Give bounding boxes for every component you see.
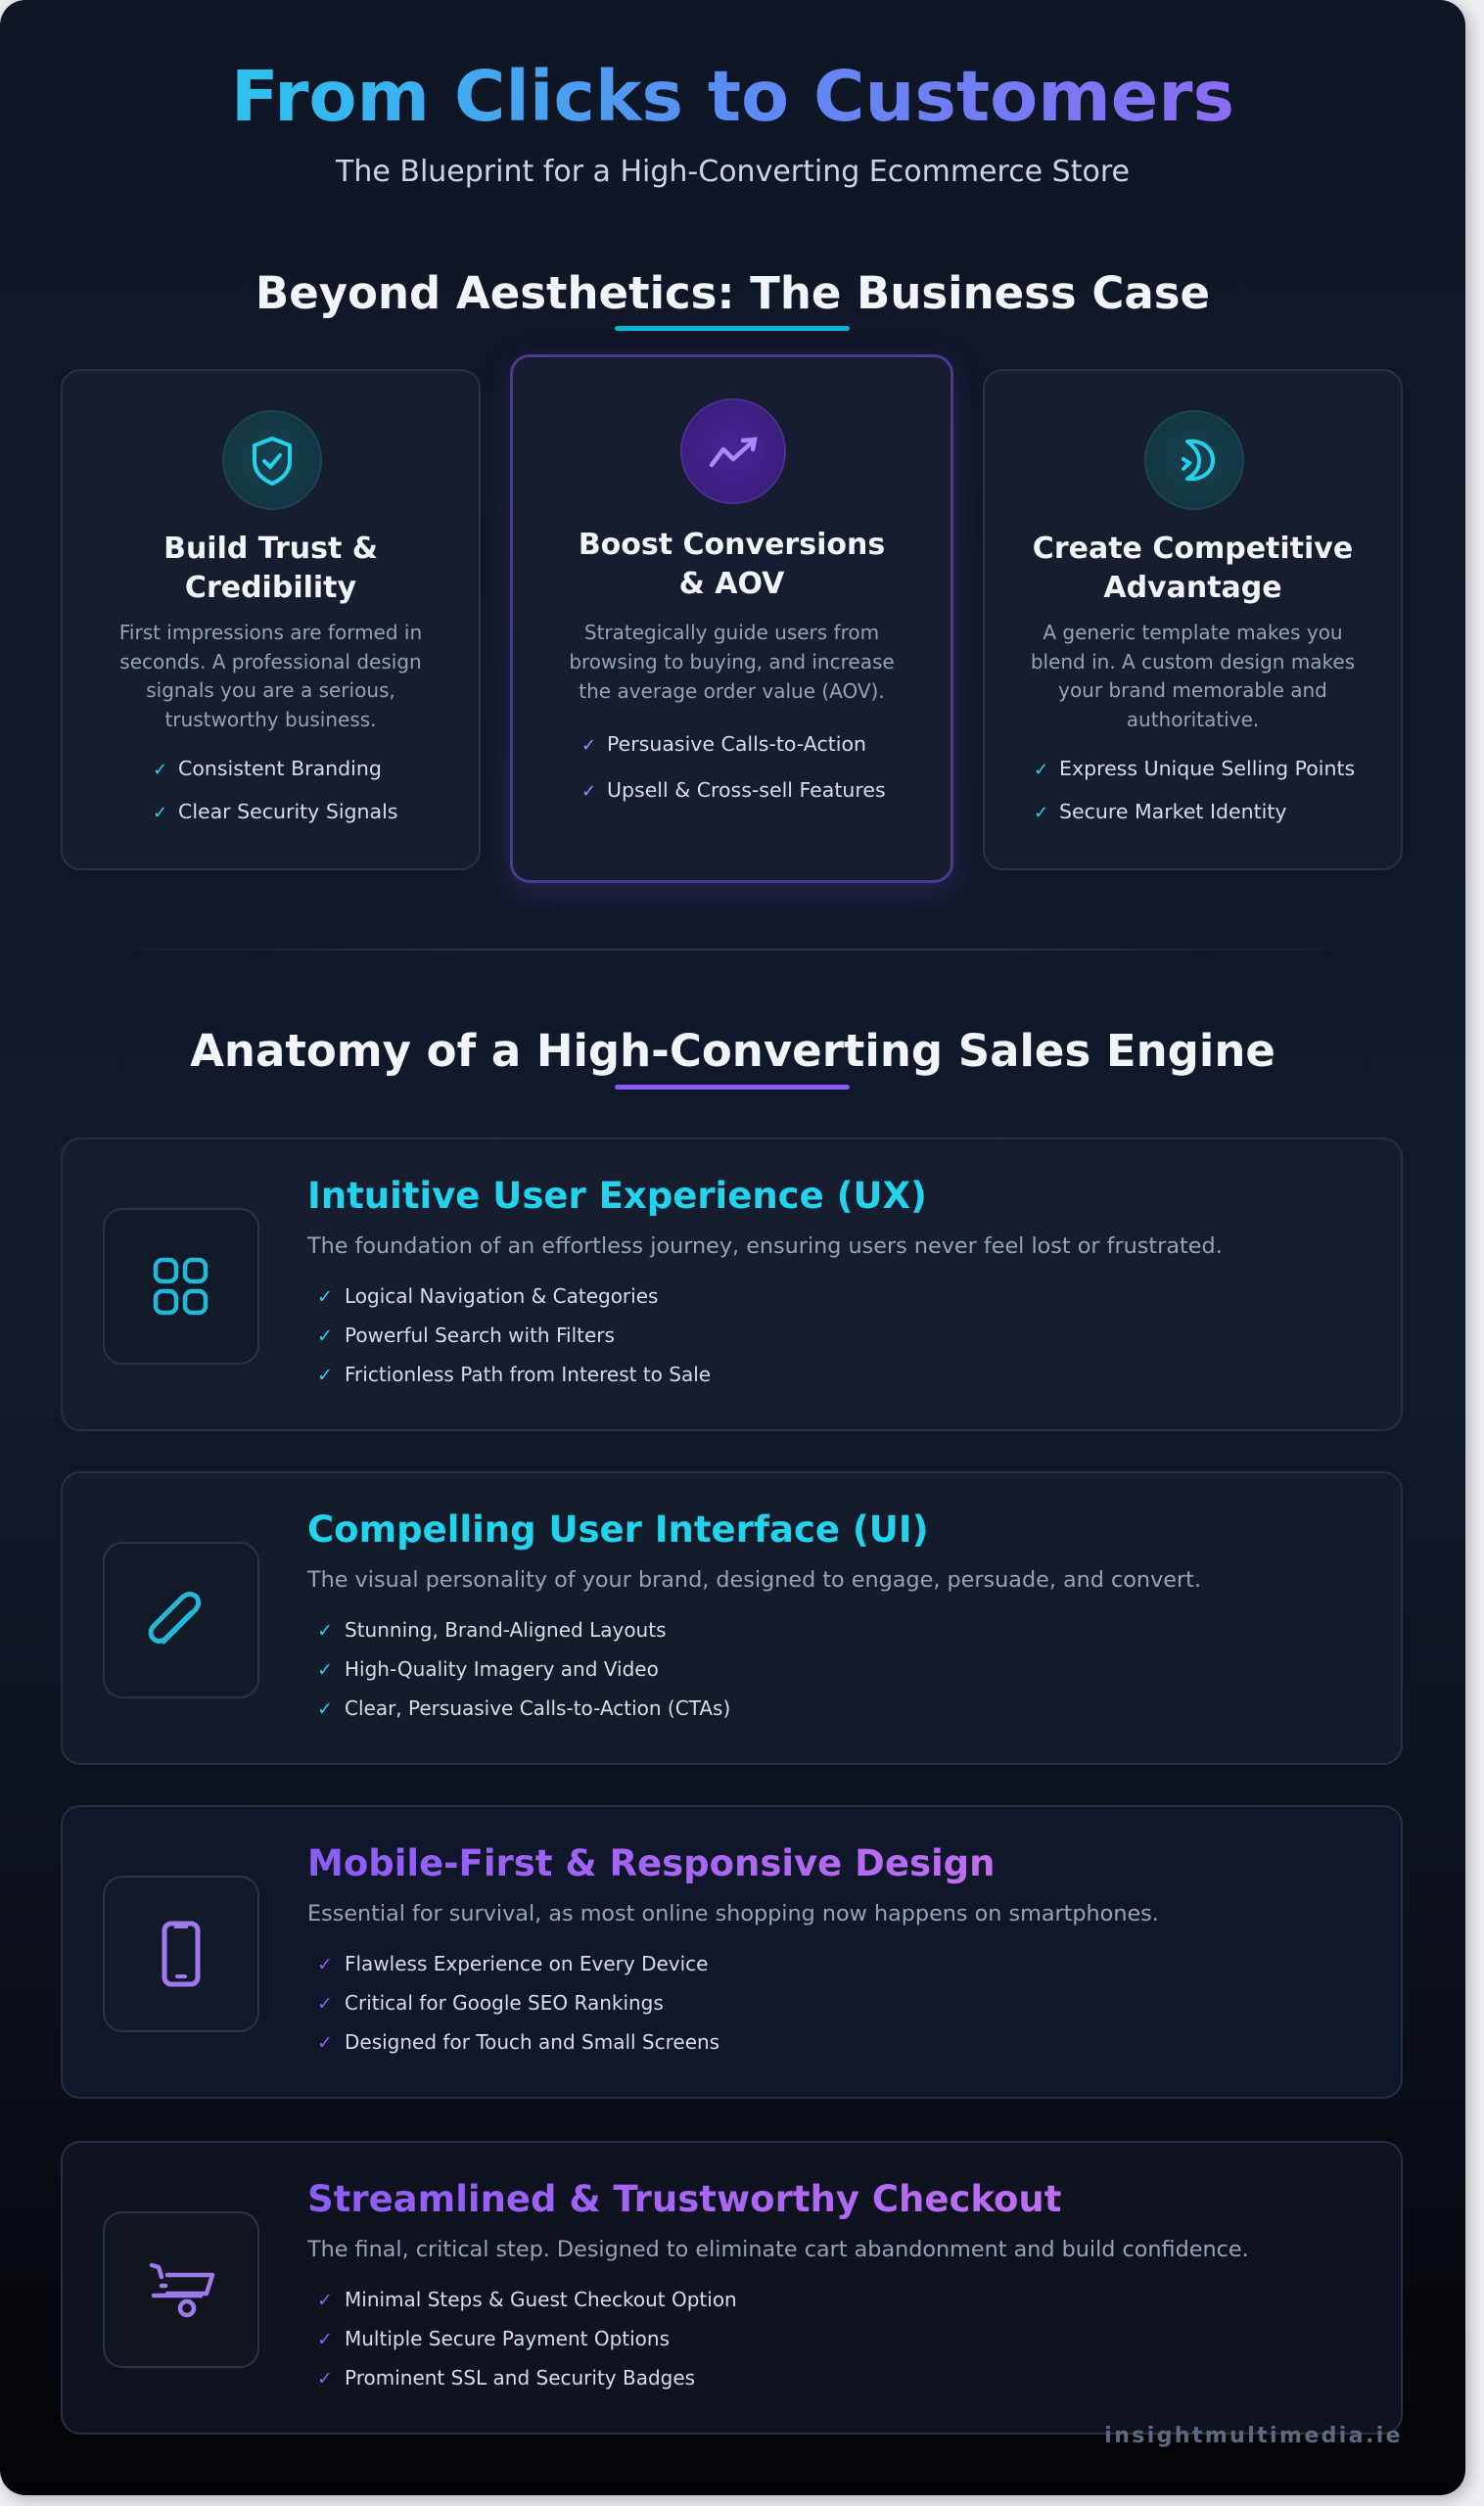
panel: checkout: Streamlined & Trustworthy Checkout	[307, 2178, 1061, 2220]
panel: competitive advantage	[983, 369, 1403, 870]
panel: UX: ✓	[317, 1365, 333, 1386]
panel: boost conversions: Upsell & Cross-sell Features	[607, 778, 886, 802]
panel: UX	[61, 1137, 1403, 1431]
panel: checkout: ✓	[317, 2329, 333, 2350]
panel: UX: Intuitive User Experience (UX)	[307, 1175, 927, 1217]
panel: checkout: The final, critical step. Designed to eliminate cart abandonment and build confidence.	[307, 2237, 1249, 2262]
panel: UX: Logical Navigation & Categories	[345, 1284, 658, 1308]
panel: boost conversions: Strategically guide users from browsing to buying, and increase the average order value (AOV).	[569, 621, 895, 703]
panel: boost conversions: ✓	[581, 735, 596, 756]
icon: shield	[222, 410, 322, 510]
panel: UI: ✓	[317, 1620, 333, 1642]
footer brand: insightmultimedia.ie	[1104, 2424, 1403, 2448]
panel: mobile: ✓	[317, 1954, 333, 1975]
heading: business case: Beyond Aesthetics: The Business Case	[255, 267, 1210, 319]
panel: UI: ✓	[317, 1659, 333, 1681]
panel: checkout: ✓	[317, 2368, 333, 2390]
panel: UI: Clear, Persuasive Calls-to-Action (CTAs)	[345, 1696, 730, 1720]
panel: build trust: ✓	[153, 760, 167, 780]
panel: competitive advantage: Express Unique Selling Points	[1059, 757, 1355, 780]
panel: checkout: Multiple Secure Payment Options	[345, 2327, 670, 2350]
panel: mobile: ✓	[317, 2032, 333, 2054]
panel: mobile	[61, 1805, 1403, 2099]
panel: build trust: Build Trust &	[163, 532, 378, 566]
panel: boost conversions: Boost Conversions	[579, 528, 885, 562]
panel: checkout: Prominent SSL and Security Badges	[345, 2366, 695, 2390]
icon: cart	[103, 2211, 259, 2368]
panel: UX: Frictionless Path from Interest to Sale	[345, 1363, 711, 1386]
panel: competitive advantage: ✓	[1034, 803, 1048, 823]
icon: paperclip	[103, 1542, 259, 1698]
panel: UX: Powerful Search with Filters	[345, 1323, 615, 1347]
panel: competitive advantage: ✓	[1034, 760, 1048, 780]
panel: UI: High-Quality Imagery and Video	[345, 1657, 659, 1681]
panel: competitive advantage: Create Competitive	[1033, 532, 1353, 566]
panel: UI: ✓	[317, 1698, 333, 1720]
panel: build trust: Clear Security Signals	[178, 800, 397, 823]
subtitle: The Blueprint for a High-Converting Ecommerce Store	[336, 155, 1130, 189]
panel: UX: ✓	[317, 1286, 333, 1308]
title: From Clicks to Customers	[231, 56, 1234, 137]
panel: build trust: First impressions are formed in seconds. A professional design signals you are a serious, trustworthy business.	[119, 621, 422, 730]
icon: grid	[103, 1208, 259, 1365]
panel: checkout: Minimal Steps & Guest Checkout Option	[345, 2288, 737, 2311]
panel: boost conversions: & AOV	[679, 567, 784, 601]
panel: boost conversions: Persuasive Calls-to-Action	[607, 732, 866, 756]
panel: boost conversions: ✓	[581, 781, 596, 802]
icon: phone	[103, 1876, 259, 2032]
panel: mobile: ✓	[317, 1993, 333, 2015]
panel: UI: Stunning, Brand-Aligned Layouts	[345, 1618, 666, 1642]
panel: UI	[61, 1471, 1403, 1765]
panel: build trust: Consistent Branding	[178, 757, 382, 780]
panel: mobile: Designed for Touch and Small Screens	[345, 2030, 719, 2054]
panel: UX: The foundation of an effortless journey, ensuring users never feel lost or frustrated.	[307, 1233, 1223, 1259]
panel: checkout	[61, 2141, 1403, 2435]
panel: UI: The visual personality of your brand, designed to engage, persuade, and convert.	[307, 1567, 1201, 1593]
panel: mobile: Critical for Google SEO Rankings	[345, 1991, 664, 2015]
icon: moon/advantage	[1144, 410, 1244, 510]
panel: mobile: Flawless Experience on Every Device	[345, 1952, 708, 1975]
panel: competitive advantage: Advantage	[1103, 571, 1282, 605]
panel: checkout: ✓	[317, 2290, 333, 2311]
panel: competitive advantage: A generic template makes you blend in. A custom design makes your brand memorable and authoritative.	[1031, 621, 1355, 730]
heading: anatomy: Anatomy of a High-Converting Sales Engine	[190, 1025, 1275, 1077]
panel: competitive advantage: Secure Market Identity	[1059, 800, 1287, 823]
panel: UX: ✓	[317, 1325, 333, 1347]
panel: boost conversions	[510, 354, 953, 883]
panel: UI: Compelling User Interface (UI)	[307, 1508, 928, 1551]
icon: trend	[680, 398, 786, 504]
panel: mobile: Essential for survival, as most online shopping now happens on smartphones.	[307, 1901, 1159, 1926]
panel: build trust	[61, 369, 481, 870]
panel: build trust: Credibility	[185, 571, 356, 605]
panel: build trust: ✓	[153, 803, 167, 823]
panel: mobile: Mobile-First & Responsive Design	[307, 1842, 995, 1884]
